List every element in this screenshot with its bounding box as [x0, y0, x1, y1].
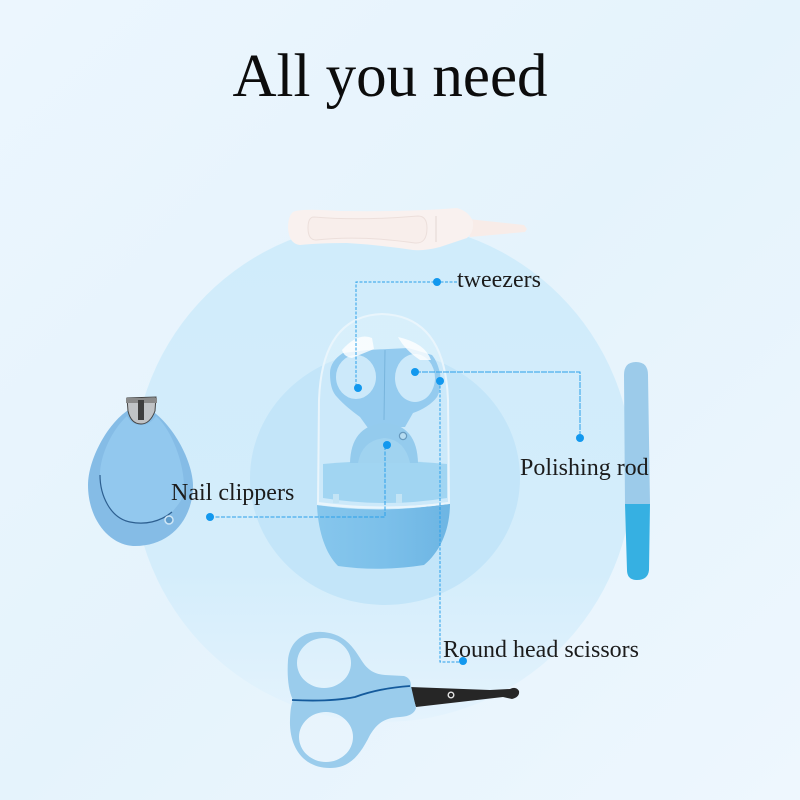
storage case	[317, 314, 450, 569]
label: round head scissors: Round head scissors	[443, 637, 639, 663]
label: tweezers: tweezers	[457, 267, 541, 293]
label: polishing rod: Polishing rod	[520, 455, 649, 481]
transparent dome	[318, 314, 449, 508]
label: nail clippers: Nail clippers	[171, 480, 294, 506]
inner circle	[250, 351, 520, 605]
line: tweezers	[356, 282, 457, 387]
scissors in case	[330, 348, 441, 428]
outer circle	[133, 222, 633, 722]
icon: polishing rod	[624, 362, 650, 580]
case lid band	[323, 461, 447, 503]
callout lines	[210, 282, 580, 662]
line: nail clippers	[210, 445, 385, 517]
title: All you need	[232, 43, 548, 110]
clipper in case	[350, 423, 418, 463]
line: polishing rod	[415, 372, 580, 438]
icon: round head scissors	[288, 632, 519, 768]
icon: tweezers	[288, 208, 527, 250]
callout dots	[206, 278, 584, 665]
case base	[317, 503, 450, 569]
icon: nail clippers	[88, 397, 193, 546]
line: round head scissors	[440, 381, 463, 662]
